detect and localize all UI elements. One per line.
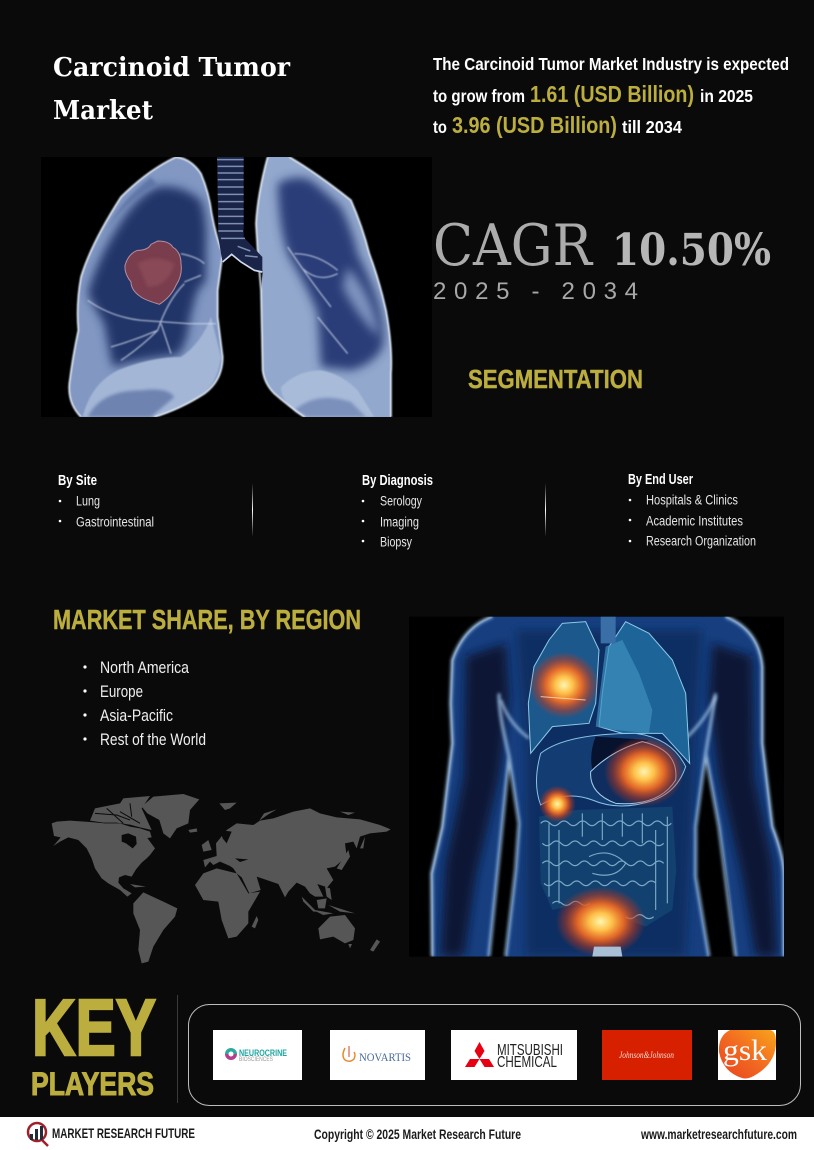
market growth summary text: to grow from — [433, 86, 525, 106]
CAGR figure — [433, 213, 771, 305]
illustration: lungs with tumor — [41, 157, 432, 417]
heading: key players — [31, 983, 156, 1102]
segment: by diagnosis: Biopsy — [380, 534, 412, 550]
world map — [52, 794, 391, 963]
segment: by end user: Research Organization — [646, 534, 756, 548]
market growth summary text — [433, 54, 789, 138]
region list: Rest of the World — [100, 731, 206, 749]
logo: novartis — [330, 1030, 425, 1080]
CAGR figure: 10.50% — [612, 225, 771, 276]
tumor — [125, 241, 181, 304]
segment: by end user — [628, 472, 756, 548]
heading: market share by region: MARKET SHARE, BY REGION — [53, 604, 361, 635]
logo: mitsubishi chemical: CHEMICAL — [497, 1054, 557, 1071]
market growth summary text: 3.96 (USD Billion) — [452, 112, 617, 138]
panel: key player logos — [188, 1004, 800, 1106]
segment: by diagnosis: Imaging — [380, 514, 419, 530]
logo: neurocrine: NEUROCRINE — [239, 1048, 287, 1059]
logo: johnson and johnson — [602, 1030, 692, 1080]
logo: neurocrine — [213, 1030, 302, 1080]
logo: johnson and johnson: Johnson&Johnson — [619, 1050, 674, 1060]
title: Market — [53, 95, 154, 126]
logo: neurocrine: BIOSCIENCES — [239, 1057, 273, 1063]
body edge highlights — [432, 617, 784, 957]
region list: Asia-Pacific — [100, 707, 173, 725]
right lung — [256, 157, 391, 417]
tumor glows — [529, 652, 684, 957]
logo: gsk — [718, 1030, 776, 1080]
title: Carcinoid Tumor — [53, 52, 291, 83]
market growth summary text: 1.61 (USD Billion) — [530, 81, 694, 107]
segment: by site — [58, 473, 154, 530]
segment: by diagnosis — [362, 473, 433, 550]
heading: key players: KEY — [32, 983, 156, 1072]
footer bar — [0, 1117, 814, 1150]
segment: by site: Gastrointestinal — [76, 514, 154, 530]
segment: by end user: Academic Institutes — [646, 514, 743, 528]
market growth summary text: in 2025 — [700, 86, 753, 106]
icon: market research future logo — [28, 1123, 48, 1146]
intestines — [539, 807, 676, 927]
region list — [83, 659, 206, 749]
market growth summary text: to — [433, 117, 447, 137]
segment: by diagnosis: Serology — [380, 494, 422, 508]
footer bar: Copyright © 2025 Market Research Future — [314, 1127, 521, 1142]
logo: mitsubishi chemical — [451, 1030, 577, 1080]
market growth summary text: till 2034 — [622, 117, 682, 137]
body silhouette — [432, 617, 784, 957]
arm and torso shading — [441, 643, 509, 957]
lungs and heart — [528, 617, 690, 763]
region list: North America — [100, 659, 190, 677]
heading: key players: PLAYERS — [31, 1066, 154, 1102]
stomach and liver — [536, 733, 686, 806]
segment: by end user: By End User — [628, 472, 693, 488]
segment: by diagnosis: By Diagnosis — [362, 473, 433, 489]
logo: mitsubishi chemical: MITSUBISHI — [497, 1042, 563, 1059]
CAGR figure: 2025 - 2034 — [433, 278, 638, 305]
trachea and bronchi — [217, 157, 262, 272]
illustration: human body with glowing tumors — [409, 617, 784, 957]
logo: gsk: gsk — [723, 1034, 767, 1067]
lung edge highlights — [69, 157, 391, 417]
logo: novartis: NOVARTIS — [359, 1052, 411, 1064]
segment: by site: By Site — [58, 473, 97, 489]
lung vessels — [88, 247, 348, 360]
region list: Europe — [100, 683, 143, 701]
segment: by site: Lung — [76, 494, 100, 508]
footer bar: MARKET RESEARCH FUTURE — [52, 1125, 195, 1141]
title — [53, 52, 291, 126]
segment: by end user: Hospitals & Clinics — [646, 492, 738, 508]
left lung — [69, 157, 223, 417]
CAGR figure: CAGR — [433, 213, 594, 279]
heading: segmentation: SEGMENTATION — [468, 364, 643, 394]
